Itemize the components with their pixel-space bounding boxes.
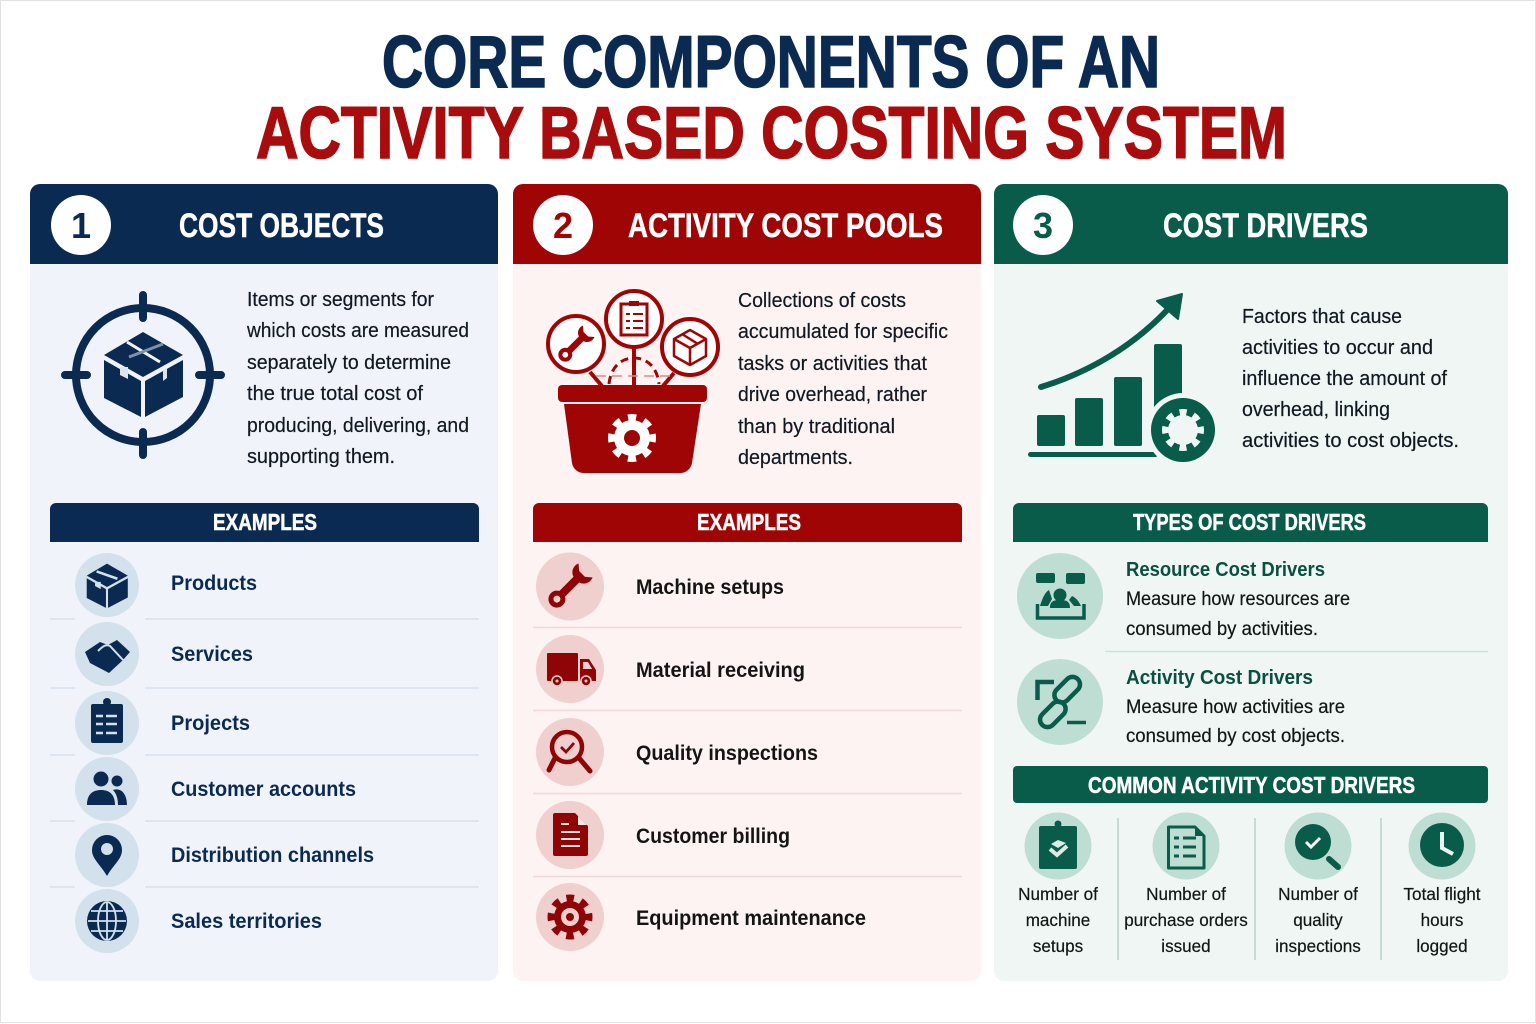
item: customer accounts — [75, 757, 356, 821]
driver: purchase orders — [1124, 812, 1248, 956]
item: products: Products — [171, 572, 257, 595]
item: machine setups — [536, 552, 784, 620]
examples bar: activity cost pools: EXAMPLES — [697, 509, 801, 535]
description: cost drivers: overhead, linking — [1242, 399, 1390, 421]
description: cost objects: Items or segments for — [247, 289, 434, 311]
icon: cost pool basket — [548, 291, 718, 473]
driver: quality inspections: quality — [1293, 911, 1343, 930]
description: cost objects: the true total cost of — [247, 383, 423, 405]
item: projects: Projects — [171, 712, 250, 735]
driver: machine setups: Number of — [1018, 885, 1098, 904]
header: cost drivers — [994, 184, 1508, 264]
common activity cost drivers bar — [1013, 766, 1488, 803]
driver: flight hours: hours — [1421, 911, 1463, 930]
item: quality inspections — [536, 718, 818, 786]
item: sales territories: Sales territories — [171, 910, 322, 933]
driver: purchase orders: Number of — [1146, 885, 1226, 904]
description: cost drivers — [1242, 306, 1459, 452]
item: customer accounts: Customer accounts — [171, 778, 356, 801]
item: equipment maintenance: Equipment maintenance — [636, 907, 866, 930]
driver type: resource cost drivers: Resource Cost Drivers — [1126, 559, 1325, 581]
driver: flight hours: Total flight — [1404, 885, 1481, 904]
types of cost drivers bar — [1013, 503, 1488, 542]
examples bar: activity cost pools — [533, 503, 962, 542]
driver: quality inspections: inspections — [1275, 937, 1361, 956]
item: distribution channels — [75, 823, 374, 887]
driver: machine setups — [1018, 812, 1098, 956]
header: cost objects: COST OBJECTS — [179, 207, 384, 245]
driver type: activity cost drivers: Activity Cost Drivers — [1126, 667, 1313, 689]
description: activity cost pools: drive overhead, rather — [738, 384, 927, 406]
header: activity cost pools: ACTIVITY COST POOLS — [628, 207, 943, 245]
panel: cost objects — [30, 184, 498, 981]
description: cost objects: supporting them. — [247, 446, 395, 468]
item: sales territories — [75, 889, 322, 953]
icon: target with box — [65, 295, 221, 455]
driver type: resource cost drivers: consumed by activities. — [1126, 619, 1318, 640]
examples bar: cost objects: EXAMPLES — [213, 509, 317, 535]
description: activity cost pools: than by traditional — [738, 416, 895, 438]
description: activity cost pools — [738, 290, 948, 469]
title: ACTIVITY BASED COSTING SYSTEM — [256, 93, 1287, 174]
header: cost drivers: COST DRIVERS — [1163, 207, 1368, 245]
description: activity cost pools: Collections of costs — [738, 290, 906, 312]
title: CORE COMPONENTS OF AN — [382, 22, 1160, 103]
header: cost drivers: 3 — [1033, 205, 1053, 246]
item: equipment maintenance — [536, 883, 866, 951]
item: quality inspections: Quality inspections — [636, 742, 818, 765]
item: material receiving — [536, 635, 805, 703]
description: cost objects: separately to determine — [247, 352, 451, 374]
common activity cost drivers bar: COMMON ACTIVITY COST DRIVERS — [1088, 772, 1415, 798]
item: machine setups: Machine setups — [636, 576, 784, 599]
types of cost drivers bar: TYPES OF COST DRIVERS — [1133, 509, 1366, 535]
item: material receiving: Material receiving — [636, 659, 805, 682]
item: distribution channels: Distribution channels — [171, 844, 374, 867]
driver type: resource cost drivers — [1017, 553, 1350, 640]
description: cost objects: which costs are measured — [246, 320, 469, 342]
header: activity cost pools: 2 — [553, 205, 573, 246]
description: cost objects — [246, 289, 469, 468]
header: activity cost pools — [513, 184, 981, 264]
driver: quality inspections: Number of — [1278, 885, 1358, 904]
driver: machine setups: machine — [1026, 911, 1090, 930]
panel: activity cost pools — [513, 184, 981, 981]
description: cost drivers: activities to occur and — [1242, 337, 1433, 359]
header: cost objects — [30, 184, 498, 264]
description: cost drivers: Factors that cause — [1242, 306, 1402, 328]
driver: purchase orders: issued — [1161, 937, 1211, 956]
description: cost drivers: activities to cost objects. — [1242, 430, 1459, 452]
item: projects — [75, 691, 250, 755]
panel: cost drivers — [994, 184, 1508, 981]
driver: flight hours — [1404, 812, 1481, 956]
driver type: activity cost drivers: consumed by cost objects. — [1126, 726, 1345, 747]
driver: purchase orders: purchase orders — [1124, 911, 1248, 930]
driver type: resource cost drivers: Measure how resources are — [1126, 589, 1350, 610]
description: activity cost pools: departments. — [738, 447, 853, 469]
description: cost drivers: influence the amount of — [1242, 368, 1447, 390]
item: services: Services — [171, 643, 253, 666]
item: customer billing: Customer billing — [636, 825, 790, 848]
item: services — [75, 622, 253, 686]
driver: flight hours: logged — [1416, 937, 1468, 956]
driver: quality inspections — [1275, 812, 1361, 956]
title — [256, 22, 1287, 174]
driver: machine setups: setups — [1033, 937, 1083, 956]
description: activity cost pools: tasks or activities that — [738, 353, 927, 375]
description: cost objects: producing, delivering, and — [247, 415, 469, 437]
header: cost objects: 1 — [71, 205, 91, 246]
driver type: activity cost drivers: Measure how activities are — [1126, 697, 1345, 718]
description: activity cost pools: accumulated for specific — [738, 321, 948, 343]
examples bar: cost objects — [50, 503, 479, 542]
item: customer billing — [536, 801, 790, 869]
driver type: activity cost drivers — [1017, 659, 1345, 747]
icon: rising bar chart with gear — [1028, 294, 1220, 467]
item: products — [75, 553, 257, 617]
